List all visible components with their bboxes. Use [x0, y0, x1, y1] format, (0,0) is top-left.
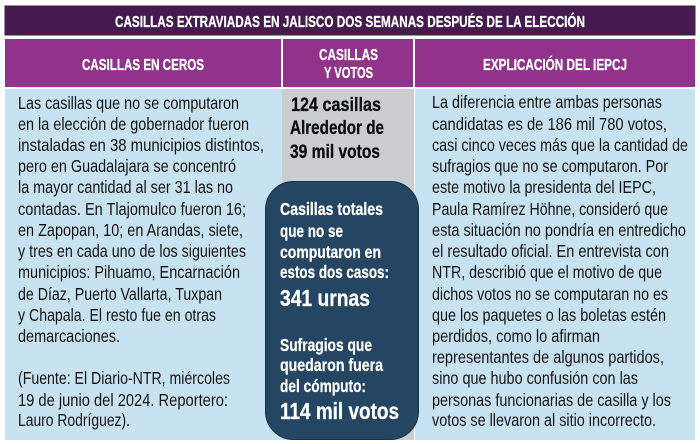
panel: casillas en ceros text — [5, 89, 282, 440]
panel: casillas en ceros text: (Fuente: El Diario-NTR, miércoles — [18, 368, 230, 388]
panel: casillas en ceros text: municipios: Pihuamo, Encarnación — [18, 262, 240, 282]
panel: explicacion text: este motivo la presidenta del IEPC, — [432, 177, 656, 197]
panel: casillas y votos: 39 mil votos — [290, 142, 380, 163]
callout: totals: computaron en — [280, 242, 381, 262]
callout: totals: Casillas totales — [280, 199, 383, 219]
callout: totals — [266, 182, 418, 440]
panel: casillas en ceros text: y tres en cada uno de los siguientes — [18, 241, 246, 261]
callout: totals: 114 mil votos — [280, 398, 399, 424]
callout: totals: que no se — [280, 221, 343, 241]
panel: explicacion text: perdidos, como lo afirman — [432, 326, 600, 346]
header: casillas y votos: CASILLAS — [319, 47, 378, 64]
panel: casillas y votos: Alrededor de — [290, 118, 384, 139]
callout: totals: estos dos casos: — [280, 262, 389, 282]
panel: explicacion text: sino que hubo confusión con las — [432, 368, 638, 388]
panel: casillas en ceros text: en Zapopan, 10; en Arandas, siete, — [18, 220, 243, 240]
panel: casillas y votos: 124 casillas — [291, 95, 381, 116]
panel: casillas en ceros text: y Chapala. El resto fue en otras — [18, 305, 216, 325]
panel: casillas en ceros text: la mayor cantidad al ser 31 las no — [18, 177, 233, 197]
callout: totals: 341 urnas — [280, 285, 370, 311]
panel: casillas en ceros text: de Díaz, Puerto Vallarta, Tuxpan — [18, 284, 222, 304]
callout: totals: del cómputo: — [280, 376, 366, 396]
panel: casillas en ceros text: en la elección de gobernador fueron — [18, 114, 249, 134]
header: explicacion del IEPCJ — [415, 39, 695, 87]
header: explicacion del IEPCJ: EXPLICACIÓN DEL IEPCJ — [483, 56, 627, 74]
panel: casillas y votos — [282, 89, 414, 440]
panel: casillas en ceros text: contadas. En Tlajomulco fueron 16; — [18, 199, 246, 219]
header: casillas y votos — [283, 39, 413, 87]
title bar — [5, 6, 695, 35]
header: casillas en ceros: CASILLAS EN CEROS — [82, 57, 204, 74]
header: casillas y votos: Y VOTOS — [324, 65, 373, 82]
header: casillas en ceros — [5, 39, 281, 87]
panel: explicacion text — [415, 89, 695, 440]
callout: totals: Sufragios que — [280, 335, 372, 355]
panel: casillas en ceros text: 19 de junio del 2024. Reportero: — [18, 390, 228, 410]
panel: casillas en ceros text: instaladas en 38 municipios distintos, — [18, 135, 264, 155]
panel: explicacion text: votos se llevaron al sitio incorrecto. — [432, 410, 656, 430]
callout: totals: quedaron fuera — [280, 355, 383, 375]
panel: casillas en ceros text: Lauro Rodríguez). — [18, 410, 130, 430]
panel: casillas en ceros text: demarcaciones. — [18, 326, 120, 346]
panel: casillas en ceros text: pero en Guadalajara se concentró — [18, 156, 236, 176]
panel: casillas en ceros text: Las casillas que no se computaron — [18, 93, 239, 113]
